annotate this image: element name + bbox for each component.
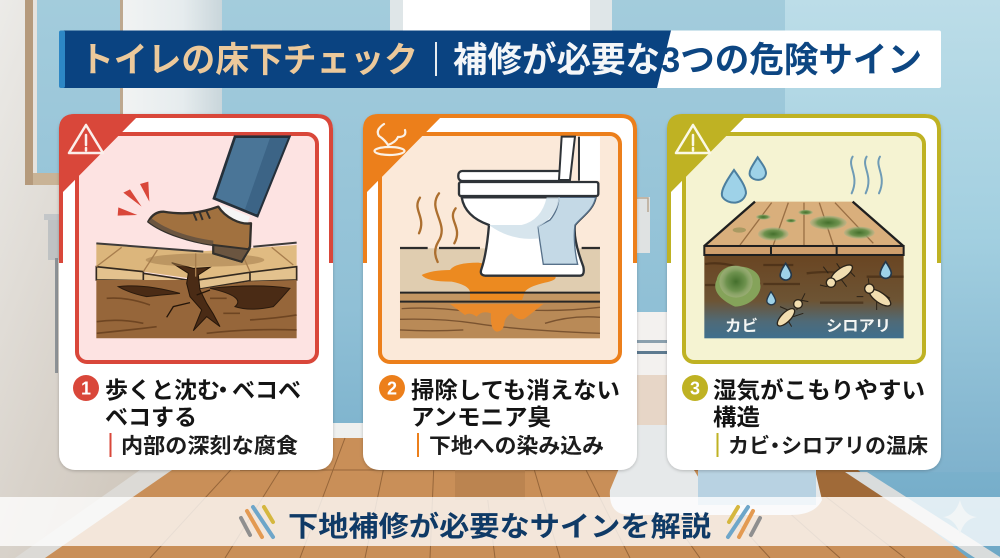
subheading 3: ・ bbox=[764, 435, 786, 458]
illustration: leaking toilet bbox=[400, 137, 600, 338]
heading 3: 湿気がこもりやすい bbox=[713, 377, 925, 403]
illustration: foot stepping on cracked floor bbox=[96, 137, 297, 338]
label: termites: シロアリ bbox=[826, 318, 891, 335]
icon: smell bbox=[374, 124, 405, 155]
title text part 2: 補修が必要な bbox=[453, 41, 660, 80]
heading 3 bbox=[713, 377, 925, 430]
number badge 3: 3 bbox=[690, 378, 700, 398]
subheading 2: 下地への染み込み bbox=[429, 435, 604, 458]
subheading 3: カビ bbox=[728, 435, 770, 458]
illustration frame bbox=[77, 134, 317, 362]
label: mould: カビ bbox=[725, 316, 758, 335]
icon: warning triangle bbox=[69, 125, 103, 153]
heading 2: アンモニア臭 bbox=[411, 404, 551, 430]
illustration frame bbox=[380, 134, 620, 362]
heading 2 bbox=[411, 377, 620, 430]
banner text: 下地補修が必要なサインを解説 bbox=[288, 510, 711, 542]
subheading 1: 内部の深刻な腐食 bbox=[121, 435, 298, 458]
card 1: sinking floor bbox=[59, 114, 333, 470]
heading 3: 構造 bbox=[713, 404, 760, 430]
heading 1: ベコする bbox=[105, 404, 197, 430]
wooden floor bbox=[40, 438, 968, 558]
heading 1: ベコベ bbox=[232, 377, 301, 403]
icon: warning triangle bbox=[676, 125, 710, 153]
heading 1: 歩くと沈む bbox=[105, 377, 220, 403]
card 2: ammonia smell bbox=[363, 114, 637, 470]
number badge 2: 2 bbox=[387, 378, 397, 398]
bottom banner bbox=[0, 497, 1000, 546]
icon: sparkle bbox=[943, 500, 977, 534]
title bar bbox=[59, 30, 941, 88]
toilet paper holder bbox=[637, 197, 650, 253]
number badge 1: 1 bbox=[81, 378, 91, 398]
number badge 1 bbox=[73, 375, 99, 401]
heading 1 bbox=[105, 377, 301, 430]
title white backing bbox=[640, 30, 941, 88]
icon: right stripes bbox=[728, 507, 760, 537]
toilet base behind cards bbox=[610, 312, 822, 515]
card 3: humid structure bbox=[667, 114, 941, 470]
number badge 3 bbox=[682, 375, 708, 401]
heading 2: 掃除しても消えない bbox=[411, 377, 620, 403]
title navy band bbox=[61, 30, 671, 88]
title text part 3: 3つの危険サイン bbox=[661, 41, 922, 80]
number badge 2 bbox=[379, 375, 405, 401]
subheading 3: シロアリの温床 bbox=[781, 435, 928, 458]
illustration: damp floor with mould and termites bbox=[704, 157, 904, 338]
icon: left stripes bbox=[241, 507, 273, 537]
title text part 1: トイレの床下チェック bbox=[80, 41, 418, 80]
heading 1: ・ bbox=[212, 377, 234, 403]
illustration frame bbox=[684, 134, 924, 362]
